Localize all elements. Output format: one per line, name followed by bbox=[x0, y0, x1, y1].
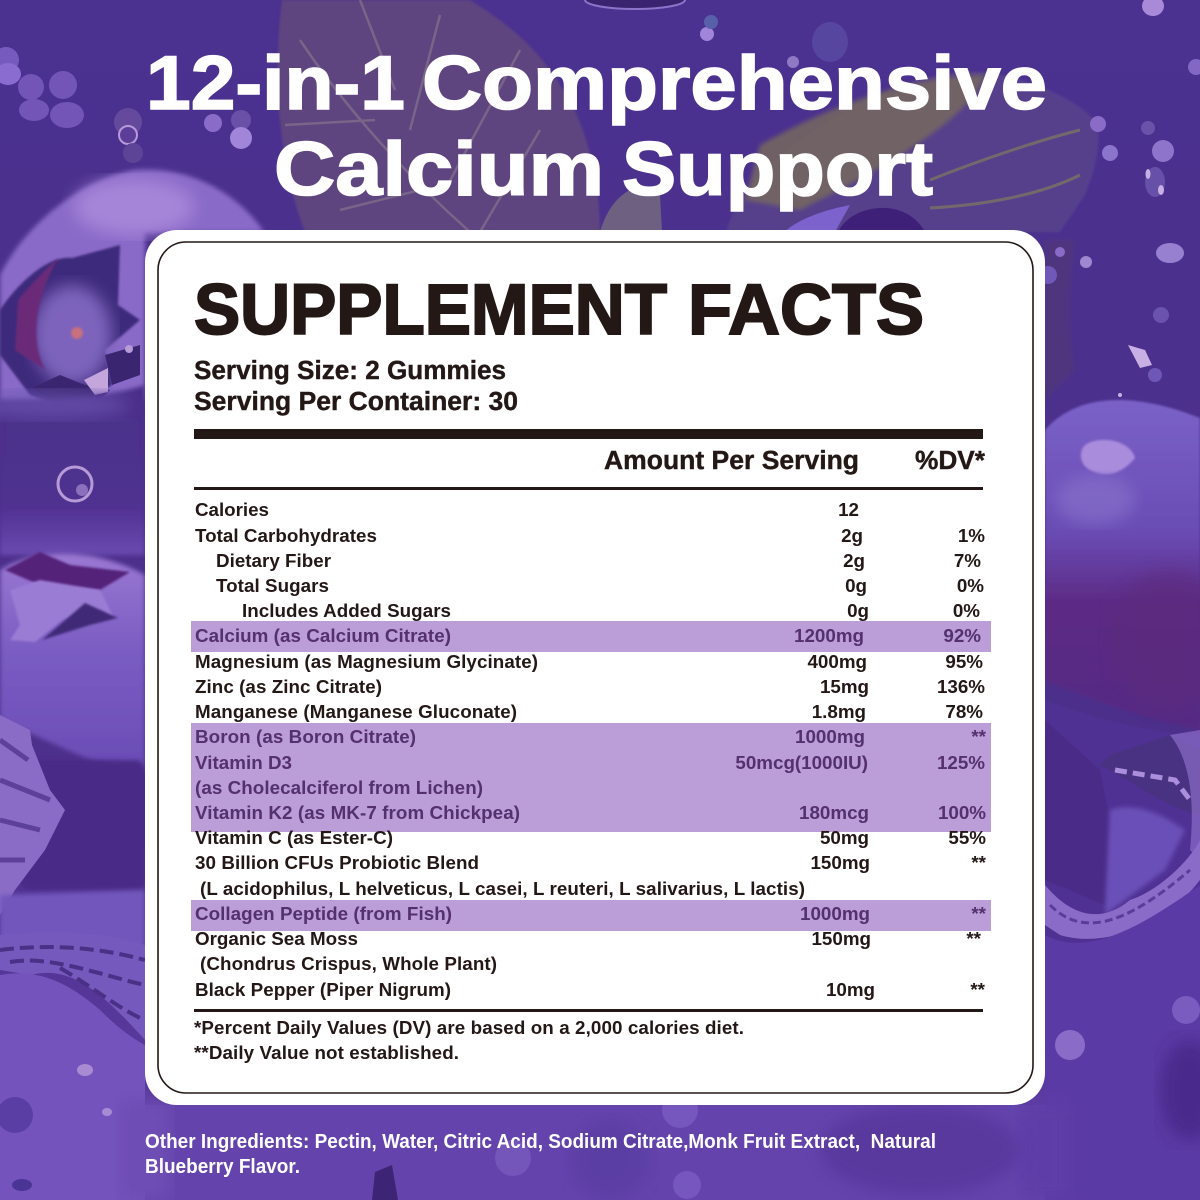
left upper blueberry bbox=[0, 169, 264, 555]
nutrient names bbox=[195, 499, 805, 1000]
amounts per serving: 0g bbox=[847, 600, 869, 621]
amounts per serving: 15mg bbox=[820, 676, 869, 697]
amounts per serving: 50mcg(1000IU) bbox=[735, 752, 868, 773]
amounts per serving bbox=[735, 499, 875, 1000]
amounts per serving: 150mg bbox=[810, 852, 870, 873]
amounts per serving: 1000mg bbox=[800, 903, 870, 924]
percent daily values: 0% bbox=[953, 600, 980, 621]
nutrient names: Calcium (as Calcium Citrate) bbox=[195, 625, 451, 646]
percent daily values: 125% bbox=[937, 752, 985, 773]
percent daily values: ** bbox=[966, 928, 982, 949]
percent daily values: 55% bbox=[948, 827, 986, 848]
panel: supplement facts bbox=[145, 230, 1045, 1105]
heading: supplement facts: FACTS bbox=[688, 271, 924, 350]
title: Comprehensive bbox=[422, 41, 1047, 126]
nutrient names: (as Cholecalciferol from Lichen) bbox=[195, 777, 483, 798]
percent daily values: 100% bbox=[938, 802, 986, 823]
nutrient names: (Chondrus Crispus, Whole Plant) bbox=[200, 953, 497, 974]
title bbox=[146, 41, 1047, 212]
right lower blueberry bbox=[1045, 700, 1200, 1200]
nutrient names: Vitamin K2 (as MK-7 from Chickpea) bbox=[195, 802, 520, 823]
table header bbox=[194, 429, 985, 490]
left lower blueberry bbox=[0, 552, 145, 1200]
leaf right bbox=[600, 72, 1098, 232]
footnotes: *Percent Daily Values (DV) are based on a 2,000 calories diet. bbox=[194, 1017, 744, 1038]
percent daily values: ** bbox=[970, 979, 986, 1000]
heading: supplement facts bbox=[194, 271, 924, 350]
nutrient names: Total Sugars bbox=[216, 575, 329, 596]
bokeh droplets bbox=[0, 0, 1200, 397]
nutrient names: Black Pepper (Piper Nigrum) bbox=[195, 979, 451, 1000]
nutrient names: Zinc (as Zinc Citrate) bbox=[195, 676, 382, 697]
percent daily values: ** bbox=[971, 852, 987, 873]
nutrient names: Includes Added Sugars bbox=[242, 600, 451, 621]
serving information: Serving Per Container: 30 bbox=[194, 388, 518, 416]
footnotes: **Daily Value not established. bbox=[194, 1042, 459, 1063]
percent daily values: ** bbox=[971, 903, 987, 924]
amounts per serving: 180mcg bbox=[799, 802, 869, 823]
amounts per serving: 10mg bbox=[826, 979, 875, 1000]
amounts per serving: 1000mg bbox=[795, 726, 865, 747]
title: Calcium bbox=[274, 127, 604, 212]
percent daily values: 92% bbox=[943, 625, 981, 646]
nutrient names: Total Carbohydrates bbox=[195, 525, 377, 546]
leaf left bbox=[278, 0, 600, 232]
bottom strip bbox=[120, 1092, 1070, 1200]
nutrient names: 30 Billion CFUs Probiotic Blend bbox=[195, 852, 479, 873]
amounts per serving: 12 bbox=[838, 499, 859, 520]
nutrient names: (L acidophilus, L helveticus, L casei, L reuteri, L salivarius, L lactis) bbox=[200, 878, 805, 899]
title: 12-in-1 bbox=[146, 41, 405, 126]
nutrient names: Vitamin C (as Ester-C) bbox=[195, 827, 393, 848]
percent daily values: ** bbox=[971, 726, 987, 747]
nutrient names: Boron (as Boron Citrate) bbox=[195, 726, 416, 747]
nutrient names: Organic Sea Moss bbox=[195, 928, 358, 949]
other ingredients bbox=[145, 1131, 936, 1178]
amounts per serving: 0g bbox=[845, 575, 867, 596]
amounts per serving: 1.8mg bbox=[812, 701, 866, 722]
other ingredients: Other Ingredients: Pectin, Water, Citric Acid, Sodium Citrate,Monk Fruit Extract, Natural bbox=[145, 1131, 936, 1153]
amounts per serving: 50mg bbox=[820, 827, 869, 848]
nutrient names: Vitamin D3 bbox=[195, 752, 292, 773]
title: Support bbox=[622, 127, 933, 212]
serving information bbox=[194, 357, 518, 416]
percent daily values: 78% bbox=[945, 701, 983, 722]
serving information: Serving Size: 2 Gummies bbox=[194, 357, 506, 385]
percent daily values bbox=[937, 525, 987, 1000]
percent daily values: 7% bbox=[954, 550, 981, 571]
heading: supplement facts: SUPPLEMENT bbox=[194, 271, 667, 350]
right upper blueberry bbox=[1045, 240, 1200, 730]
nutrient names: Manganese (Manganese Gluconate) bbox=[195, 701, 517, 722]
amounts per serving: 1200mg bbox=[794, 625, 864, 646]
other ingredients: Blueberry Flavor. bbox=[145, 1156, 300, 1178]
nutrient names: Calories bbox=[195, 499, 269, 520]
nutrient names: Magnesium (as Magnesium Glycinate) bbox=[195, 651, 538, 672]
nutrient names: Dietary Fiber bbox=[216, 550, 332, 571]
nutrient names: Collagen Peptide (from Fish) bbox=[195, 903, 452, 924]
amounts per serving: 2g bbox=[841, 525, 863, 546]
table header: Amount Per Serving bbox=[604, 447, 859, 475]
percent daily values: 95% bbox=[945, 651, 983, 672]
table header: %DV* bbox=[915, 447, 985, 475]
footnotes bbox=[194, 1017, 744, 1063]
amounts per serving: 2g bbox=[843, 550, 865, 571]
percent daily values: 136% bbox=[937, 676, 985, 697]
highlight bands bbox=[191, 621, 991, 931]
percent daily values: 1% bbox=[958, 525, 985, 546]
percent daily values: 0% bbox=[957, 575, 984, 596]
amounts per serving: 400mg bbox=[807, 651, 867, 672]
amounts per serving: 150mg bbox=[811, 928, 871, 949]
